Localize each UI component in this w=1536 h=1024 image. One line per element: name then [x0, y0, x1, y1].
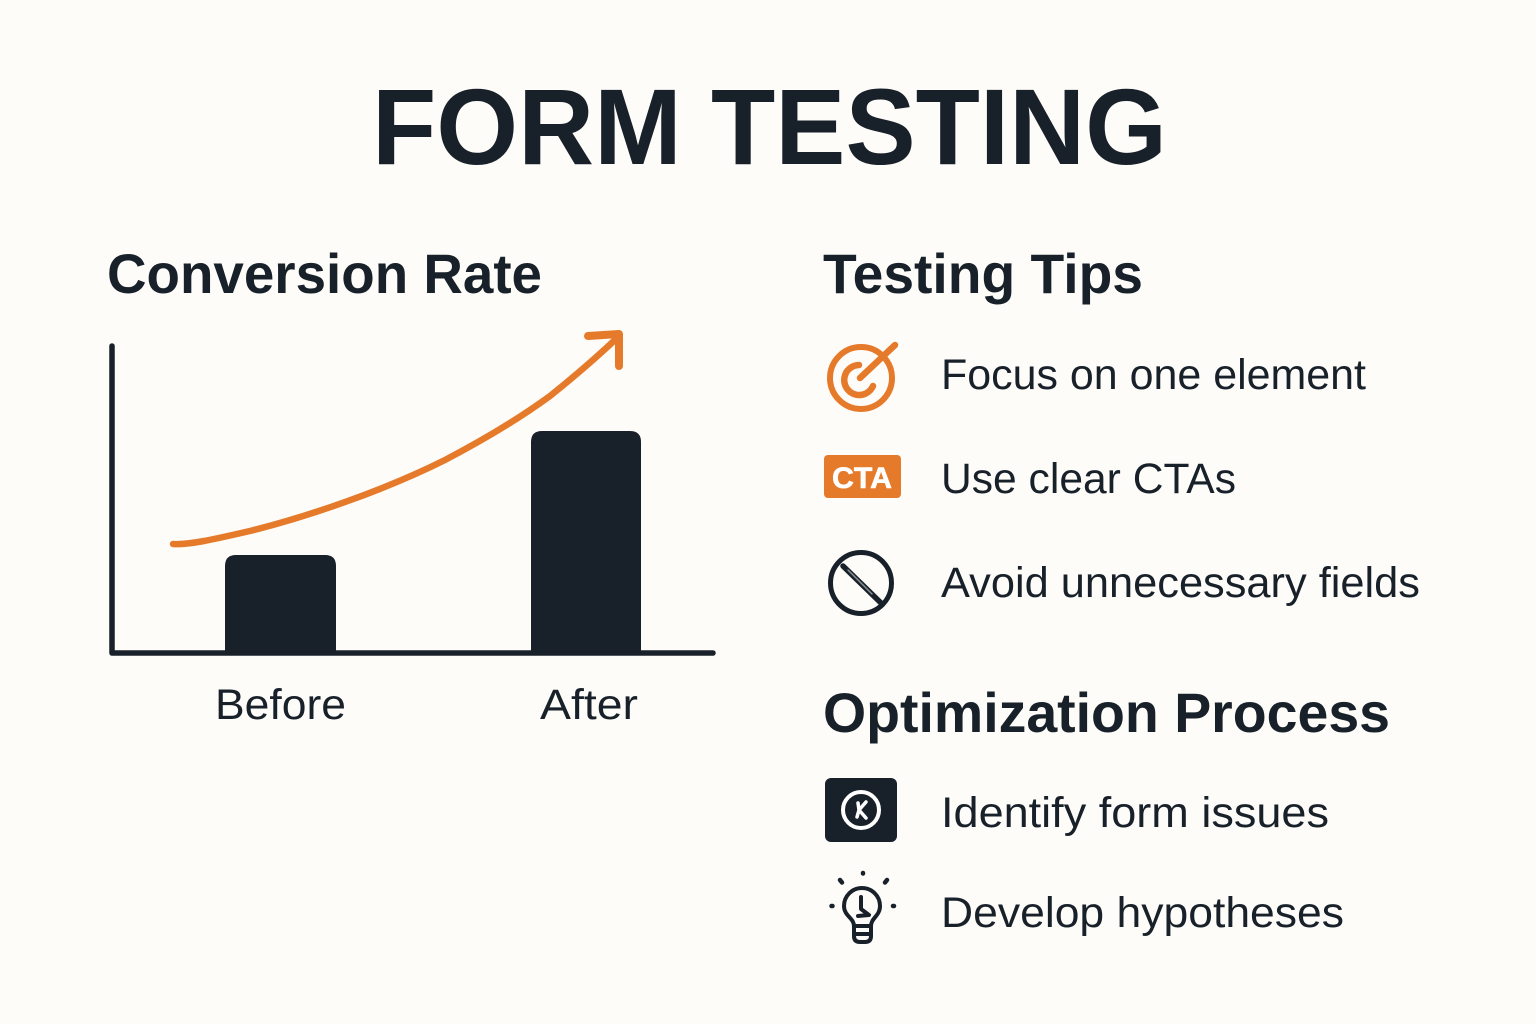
label: before: Before: [215, 681, 346, 729]
step: identify form issues: [825, 778, 1329, 842]
label: after: After: [540, 681, 638, 729]
text: focus on one element: Focus on one element: [941, 351, 1366, 399]
icon: prohibited sign: [830, 552, 892, 614]
step: develop hypotheses: [832, 873, 1344, 942]
tip: focus on one element: [830, 345, 1366, 409]
heading: conversion rate: Conversion Rate: [107, 242, 542, 305]
heading: testing tips: Testing Tips: [823, 242, 1143, 305]
icon: CTA button: [824, 455, 901, 498]
bar: after: [531, 431, 641, 654]
arrow: upward trend: [173, 334, 619, 544]
text: identify form issues: Identify form issues: [941, 789, 1329, 837]
text: develop hypotheses: Develop hypotheses: [941, 889, 1344, 937]
icon: CTA button: CTA: [832, 462, 892, 495]
chart axes: [112, 346, 713, 653]
tip: use clear CTAs: [824, 455, 1236, 503]
text: use clear CTAs: Use clear CTAs: [941, 455, 1236, 503]
tip: avoid unnecessary fields: [830, 552, 1420, 614]
title: FORM TESTING: [372, 66, 1167, 187]
icon: target: [830, 345, 895, 409]
icon: light bulb: [832, 873, 894, 942]
heading: optimization process: Optimization Process: [823, 681, 1390, 744]
text: avoid unnecessary fields: Avoid unnecessary fields: [941, 559, 1420, 607]
icon: dark square with dial: [825, 778, 897, 842]
bar: before: [225, 555, 336, 654]
bar chart: conversion rate: [112, 334, 713, 729]
